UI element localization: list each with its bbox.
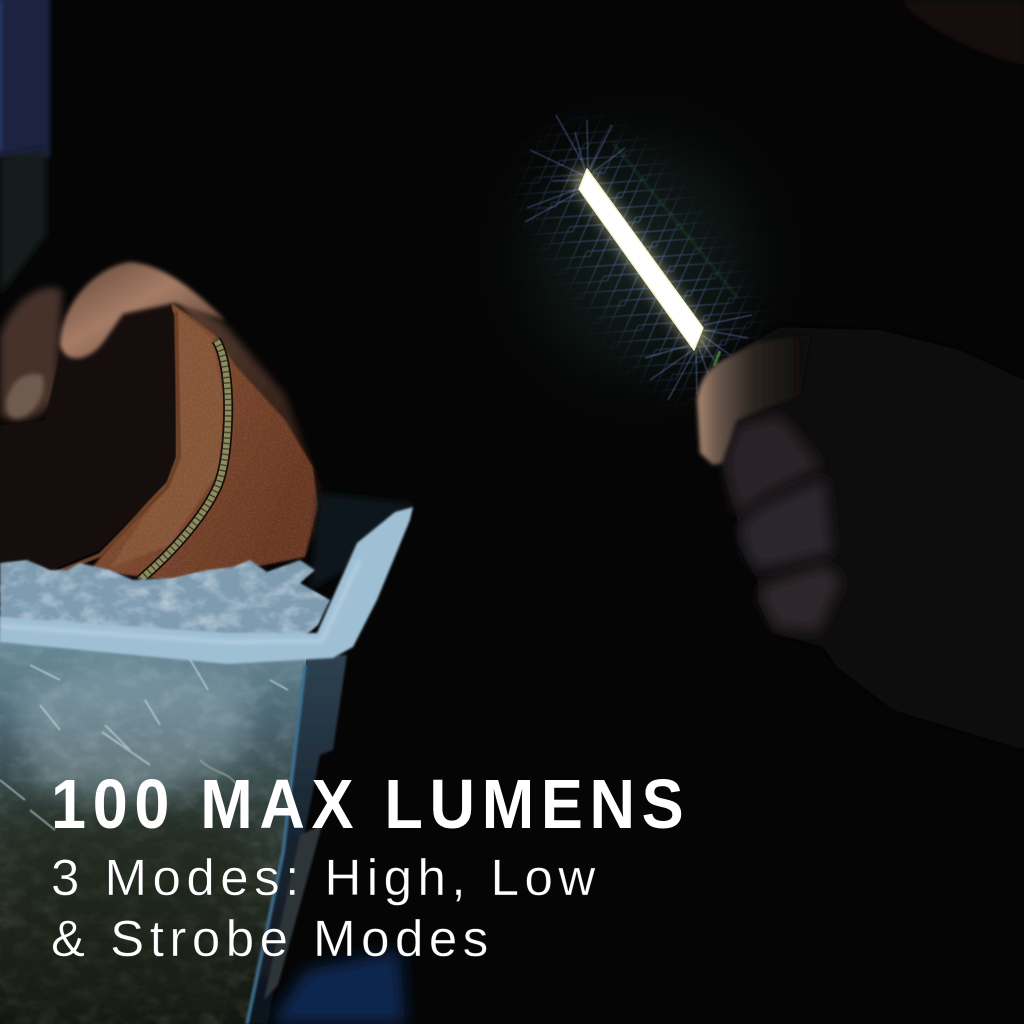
hand silhouette [697,327,1024,750]
heading: 100 MAX LUMENS [51,765,690,843]
light bar [579,169,720,366]
leather pouch [0,302,318,582]
thumb [697,335,810,465]
person's head top right [900,0,1024,65]
pouch side [90,303,318,582]
bin back rim [310,493,413,590]
hand holding pouch [0,285,320,560]
light glow [465,78,815,438]
plastic bin with bubble wrap [0,493,413,1024]
upper finger over pouch [60,262,225,358]
bin rim [0,507,413,664]
hand holding light [697,327,1024,750]
background top-left blue panel [0,0,50,295]
bin side panel [245,655,347,1024]
blue edge [247,665,305,1024]
blue floor [270,950,405,1024]
subheading [51,849,601,967]
lower finger [0,288,62,421]
bubble wrap [0,560,330,640]
subheading: & Strobe Modes [51,910,494,967]
fingernail [6,374,44,418]
subheading: 3 Modes: High, Low [51,849,601,906]
plate on side [264,825,322,1000]
light rays [516,114,765,404]
forearm [170,285,320,560]
pouch dark face [0,302,176,570]
zipper [140,340,228,580]
finger three [762,565,842,632]
bin front [0,630,307,1024]
plastic highlights [0,656,288,830]
finger one [724,415,822,515]
finger two [740,478,832,570]
